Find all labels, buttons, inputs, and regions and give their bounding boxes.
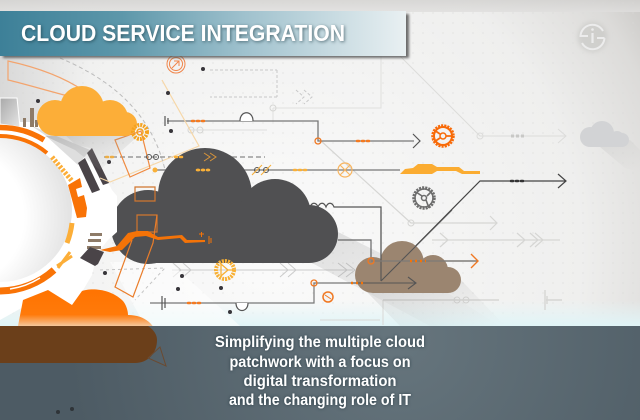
logo	[578, 22, 608, 52]
icon: orange circles and arrow	[311, 138, 478, 286]
orange cloud upper	[37, 86, 137, 136]
footer text: patchwork with a focus on	[230, 354, 410, 371]
footer text: and the changing role of IT	[229, 392, 411, 409]
footer panel	[0, 326, 640, 420]
lower orange cloud in footer	[0, 326, 157, 363]
title: CLOUD SERVICE INTEGRATION	[21, 20, 345, 46]
gauge outlines	[8, 58, 199, 300]
circuit lines behind clouds	[104, 113, 566, 310]
icon: yellow gear on dark cloud	[216, 261, 234, 279]
footer dots	[56, 407, 74, 414]
circuit dots	[36, 67, 232, 314]
connector dot and dashes on dark cloud	[152, 168, 211, 172]
icon: gray gear	[414, 188, 434, 208]
orange dashes	[106, 121, 525, 303]
faint triangle	[148, 347, 166, 366]
brown cloud	[355, 241, 461, 293]
main dark cloud	[111, 148, 338, 264]
lines over brown cloud	[351, 210, 478, 289]
icon: x lamps	[146, 154, 271, 175]
chevrons on dark cloud	[204, 153, 216, 161]
gear disc	[0, 98, 117, 320]
lamp icon	[338, 163, 352, 177]
faint background circuitry	[172, 56, 566, 325]
orange trace on dark cloud	[100, 231, 211, 252]
long shadows	[110, 140, 640, 326]
yellow trace	[400, 164, 480, 174]
icon: gear top	[167, 55, 185, 73]
gray cloud	[580, 121, 629, 147]
orange gear right	[433, 126, 453, 146]
icon: yellow gear	[133, 125, 147, 139]
icon: prohibition sign	[323, 292, 333, 302]
upper orange cloud shadow	[45, 136, 138, 170]
lower orange cloud	[0, 289, 157, 363]
footer text: digital transformation	[244, 373, 396, 390]
title band	[0, 11, 409, 58]
footer text: Simplifying the multiple cloud	[215, 334, 425, 351]
footer text	[215, 334, 425, 409]
